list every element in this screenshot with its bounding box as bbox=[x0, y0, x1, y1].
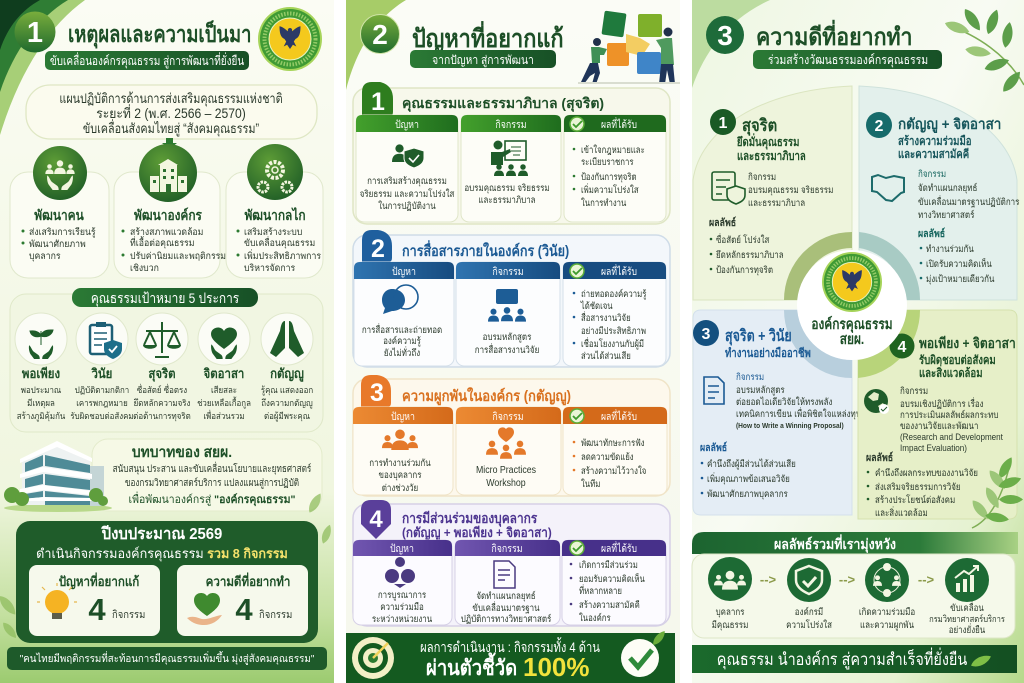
card: problem 4 staff participation: (กตัญญู + พอเพียง + จิตอาสา) bbox=[402, 525, 552, 541]
outcome: sustainable department: อย่างยั่งยืน bbox=[949, 623, 985, 635]
expected outcomes panel: ผลลัพธ์รวมที่เรามุ่งหวัง bbox=[774, 533, 896, 553]
column: activity: กิจกรรม bbox=[491, 543, 523, 555]
badge 2 bbox=[362, 230, 392, 263]
card: good deeds count bbox=[177, 565, 308, 636]
column: activity: กิจกรรม bbox=[492, 411, 524, 423]
quote bar bbox=[7, 647, 327, 670]
quadrant: sufficiency and volunteerism: การประเมินผลลัพธ์ผลกระทบ bbox=[900, 409, 998, 420]
virtue: discipline: รับผิดชอบต่อสังคม bbox=[70, 411, 134, 421]
illustration: team with puzzle pieces bbox=[578, 11, 680, 84]
subtitle pill: จากปัญหา สู่การพัฒนา bbox=[432, 54, 534, 67]
quadrant: sufficiency and volunteerism: และสิ่งแวดล้อม bbox=[919, 364, 983, 380]
quadrant: sufficiency and volunteerism: อบรมเชิงปฏิบัติการ เรื่อง bbox=[900, 397, 984, 409]
icon: document pen bbox=[704, 377, 724, 404]
card: problem 4 staff participation: การมีส่วนร่วมของบุคลากร bbox=[402, 510, 537, 527]
quadrant: honesty and discipline: (How to Write a Winning Proposal) bbox=[736, 423, 844, 430]
quadrant: sufficiency and volunteerism: Impact Evaluation) bbox=[900, 443, 967, 453]
outcome: transparent organization: ความโปร่งใส bbox=[786, 619, 833, 630]
quadrant: honesty and discipline: เทคนิคการเขียน เพื่อพิชิตใจแหล่งทุน bbox=[736, 407, 861, 420]
virtue: sufficiency: มีเหตุผล bbox=[27, 398, 55, 409]
quadrant: gratitude and volunteerism: จัดทำแผนกลยุทธ์ bbox=[918, 182, 977, 194]
panel: reasons and background bbox=[0, 0, 334, 683]
panel: good deeds to do bbox=[692, 0, 1024, 683]
quadrant: gratitude and volunteerism: กตัญญู + จิตอาสา bbox=[898, 116, 1001, 133]
quadrant: sufficiency and volunteerism: สร้างประโยชน์ต่อสังคม bbox=[875, 494, 955, 505]
center hub: virtuous organization: องค์กรคุณธรรม bbox=[811, 316, 893, 333]
virtue: gratitude: กตัญญู bbox=[270, 366, 304, 382]
column: results bbox=[563, 262, 666, 366]
card: problem 1 ethics and governance bbox=[353, 82, 670, 224]
outcome: sustainable department: กรมวิทยาศาสตร์บริการ bbox=[929, 613, 1005, 624]
decoration: branch of leaves bbox=[943, 6, 1024, 95]
icon: clipboard shield bbox=[712, 172, 745, 204]
outcome: virtuous staff bbox=[708, 557, 752, 631]
column: results: อย่างมีประสิทธิภาพ bbox=[581, 325, 646, 336]
virtue: gratitude bbox=[261, 313, 313, 422]
quadrant: honesty and discipline bbox=[693, 310, 861, 515]
quadrant: honesty and discipline: ทำงานอย่างมืออาชีพ bbox=[725, 346, 811, 360]
results banner: 100% bbox=[523, 652, 590, 682]
panel: role of the department: บทบาทของ สยผ. bbox=[132, 445, 232, 461]
card: mechanism development: พัฒนากลไก bbox=[244, 206, 306, 223]
quadrant: gratitude and volunteerism: มุ่งเป้าหมายเดียวกัน bbox=[926, 273, 994, 285]
quadrant: gratitude and volunteerism: ขับเคลื่อนมาตรฐานปฏิบัติการ bbox=[918, 195, 1020, 208]
column: problem: ต่างช่วงวัย bbox=[382, 482, 418, 493]
card: problem 3 organizational engagement: ความผูกพันในองค์กร (กตัญญู) bbox=[402, 386, 571, 405]
column: results: ผลที่ได้รับ bbox=[601, 409, 637, 423]
card: people development: บุคลากร bbox=[29, 251, 61, 262]
quadrant: honesty: กิจกรรม bbox=[748, 171, 776, 182]
column: results: ในทีม bbox=[581, 478, 600, 489]
virtue: honesty: สุจริต bbox=[148, 366, 176, 382]
quadrant: honesty bbox=[693, 86, 852, 300]
quadrant: sufficiency and volunteerism: 4 bbox=[898, 339, 907, 356]
panel: role of the department: เพื่อพัฒนาองค์กรสู่ "องค์กรคุณธรรม" bbox=[129, 492, 295, 507]
card: mechanism development bbox=[226, 144, 323, 278]
quadrant: honesty: 1 bbox=[719, 115, 728, 132]
quadrant: gratitude and volunteerism: สร้างความร่วมมือ bbox=[898, 134, 972, 148]
quadrant: sufficiency and volunteerism: พอเพียง + จิตอาสา bbox=[919, 335, 1016, 351]
quadrant: honesty and discipline: ต่อยอดไอเดียวิจัยให้ทรงพลัง bbox=[736, 396, 832, 407]
section number 1: 1 bbox=[27, 17, 43, 49]
arrow down bbox=[162, 138, 177, 149]
quadrant: honesty and discipline: กิจกรรม bbox=[736, 371, 764, 382]
card: problems count: กิจกรรม bbox=[112, 610, 145, 621]
card: organization development: สร้างสภาพแวดล้อม bbox=[130, 227, 203, 237]
icon: target bbox=[352, 637, 394, 679]
column: results: ผลที่ได้รับ bbox=[601, 117, 637, 131]
card: organization development: พัฒนาองค์กร bbox=[134, 207, 202, 223]
quadrant: honesty and discipline: พัฒนาศักยภาพบุคลากร bbox=[707, 488, 788, 500]
column: results: ที่หลากหลาย bbox=[579, 584, 622, 596]
subtitle pill: ร่วมสร้างวัฒนธรรมองค์กรคุณธรรม bbox=[768, 52, 928, 67]
quadrant: honesty: และธรรมาภิบาล bbox=[737, 150, 806, 163]
column: results: ยอมรับความคิดเห็น bbox=[579, 572, 645, 584]
card: problem 2 internal communication bbox=[353, 230, 670, 367]
column: results bbox=[562, 540, 666, 625]
column: results: ระเบียบราชการ bbox=[581, 156, 634, 167]
column: activity: และธรรมาภิบาล bbox=[478, 194, 536, 205]
quadrant: honesty and discipline: 3 bbox=[702, 326, 711, 343]
card: problem 4 staff participation bbox=[353, 500, 670, 626]
national plan box: ระยะที่ 2 (พ.ศ. 2566 – 2570) bbox=[96, 104, 246, 121]
column: problem bbox=[353, 407, 453, 495]
subtitle pill bbox=[45, 51, 249, 70]
arrow: --> bbox=[839, 572, 856, 587]
quadrant: honesty and discipline: อบรมหลักสูตร bbox=[736, 384, 785, 396]
arrow: --> bbox=[760, 572, 777, 587]
card: organization development: ที่เอื้อต่อคุณธรรม bbox=[130, 235, 194, 249]
column: activity bbox=[456, 407, 561, 495]
card: problems count: ปัญหาที่อยากแก้ bbox=[59, 572, 139, 589]
corner leaf bbox=[692, 0, 770, 88]
quadrant: sufficiency and volunteerism: กิจกรรม bbox=[900, 385, 928, 396]
column: problem bbox=[354, 262, 454, 366]
subtitle pill: ขับเคลื่อนองค์กรคุณธรรม สู่การพัฒนาที่ยั่งยืน bbox=[50, 52, 244, 68]
quadrant: gratitude and volunteerism: เปิดรับความคิดเห็น bbox=[926, 257, 992, 269]
badge 1: 1 bbox=[371, 88, 385, 116]
virtues heading bbox=[72, 288, 258, 307]
heading: เหตุผลและความเป็นมา bbox=[68, 19, 251, 49]
quadrant: honesty: ยึดมั่นคุณธรรม bbox=[736, 133, 799, 150]
section number 3: 3 bbox=[717, 20, 733, 51]
outcome: collaboration bbox=[859, 558, 915, 631]
section number 2: 2 bbox=[372, 19, 388, 50]
column: problem: ยังไม่ทั่วถึง bbox=[384, 346, 420, 358]
quadrant: gratitude and volunteerism: ทำงานร่วมกัน bbox=[926, 243, 974, 254]
panel: role of the department bbox=[92, 439, 322, 511]
quadrant: honesty and discipline: ผลลัพธ์ bbox=[700, 441, 727, 454]
column: problem: ในการปฏิบัติงาน bbox=[378, 200, 436, 211]
column: results: สื่อสารงานวิจัย bbox=[581, 311, 631, 323]
column: problem bbox=[356, 115, 458, 222]
decoration: side leaves bbox=[0, 491, 333, 640]
card: people development: พัฒนาศักยภาพ bbox=[29, 239, 86, 249]
column: results: ในองค์กร bbox=[579, 612, 611, 623]
outcome: transparent organization: องค์กรมี bbox=[795, 606, 823, 617]
panel: five target virtues bbox=[10, 288, 323, 432]
quote bar: "คนไทยมีพฤติกรรมที่สะท้อนการมีคุณธรรมเพิ่มขึ้น มุ่งสู่สังคมคุณธรรม" bbox=[20, 651, 315, 665]
column: results bbox=[564, 115, 666, 222]
quadrant: gratitude and volunteerism: และความสามัคคี bbox=[898, 147, 969, 161]
virtue: volunteerism: จิตอาสา bbox=[203, 366, 244, 381]
virtue: volunteerism: เพื่อส่วนรวม bbox=[203, 409, 245, 421]
card: good deeds count: กิจกรรม bbox=[259, 610, 292, 621]
column: activity: จัดทำแผนกลยุทธ์ bbox=[476, 590, 536, 602]
virtue: volunteerism: เสียสละ bbox=[211, 385, 237, 395]
quadrant: gratitude and volunteerism: กิจกรรม bbox=[918, 168, 946, 179]
corner leaf bbox=[346, 0, 406, 90]
section number 1 bbox=[14, 12, 56, 52]
badge 2: 2 bbox=[371, 235, 385, 263]
center hub: virtuous organization bbox=[797, 250, 907, 360]
card: problem 2 internal communication: การสื่อสารภายในองค์กร (วินัย) bbox=[402, 240, 569, 259]
quadrant: sufficiency and volunteerism: ของงานวิจัยและพัฒนา bbox=[900, 420, 979, 431]
column: problem: องค์ความรู้ bbox=[383, 335, 421, 347]
column: activity: อบรมคุณธรรม จริยธรรม bbox=[464, 182, 550, 194]
column: activity: การสื่อสารงานวิจัย bbox=[475, 343, 539, 355]
quadrant: sufficiency and volunteerism: และสิ่งแวดล้อม bbox=[875, 506, 928, 518]
card: mechanism development: เสริมสร้างระบบ bbox=[244, 227, 303, 237]
heading: ปัญหาที่อยากแก้ bbox=[412, 20, 564, 53]
column: activity: กิจกรรม bbox=[492, 266, 524, 278]
national plan box: ขับเคลื่อนสังคมไทยสู่ “สังคมคุณธรรม” bbox=[83, 119, 259, 137]
virtue: gratitude: ถึงความกตัญญู bbox=[261, 398, 313, 409]
outcome: virtuous staff: มีคุณธรรม bbox=[712, 619, 748, 631]
expected outcomes panel bbox=[692, 532, 1018, 638]
card: problem 1 ethics and governance: คุณธรรมและธรรมาภิบาล (สุจริต) bbox=[402, 95, 604, 112]
card: problems count bbox=[29, 565, 160, 636]
column: results: สร้างความสามัคคี bbox=[579, 599, 640, 610]
column: results: ในการทำงาน bbox=[581, 197, 626, 208]
card: problem 3 organizational engagement bbox=[353, 375, 670, 496]
icon: check mark bbox=[621, 629, 667, 677]
quadrant: honesty and discipline: คำนึงถึงผู้มีส่วนได้ส่วนเสีย bbox=[707, 458, 796, 470]
virtue: sufficiency: พอเพียง bbox=[22, 366, 60, 381]
column: results: พัฒนาทักษะการฟัง bbox=[581, 437, 645, 448]
column: problem: ปัญหา bbox=[391, 411, 415, 423]
column: activity: กิจกรรม bbox=[495, 119, 527, 131]
virtue: discipline bbox=[70, 313, 134, 421]
card: organization development: ปรับค่านิยมและพฤติกรรม bbox=[130, 251, 226, 261]
section number 2 bbox=[360, 14, 400, 54]
icon: handshake bbox=[872, 175, 904, 201]
badge 3: 3 bbox=[370, 379, 384, 407]
column: results: เชื่อมโยงงานกับผู้มี bbox=[581, 337, 644, 350]
virtue: honesty: ซื่อสัตย์ ซื่อตรง bbox=[137, 383, 187, 395]
column: problem: จริยธรรม และความโปร่งใส bbox=[360, 188, 455, 199]
quadrant: honesty: ยึดหลักธรรมาภิบาล bbox=[716, 249, 784, 260]
badge 4 bbox=[361, 500, 391, 539]
quadrant: sufficiency and volunteerism: ส่งเสริมจริยธรรมการวิจัย bbox=[875, 481, 961, 492]
outcome: collaboration: เกิดความร่วมมือ bbox=[859, 606, 915, 617]
column: activity: ขับเคลื่อนมาตรฐาน bbox=[472, 601, 540, 614]
panel: role of the department: สนับสนุน ประสาน และขับเคลื่อนนโยบายและยุทธศาสตร์ bbox=[113, 461, 311, 475]
quadrant: gratitude and volunteerism: ทางวิทยาศาสตร์ bbox=[918, 209, 975, 220]
column: results: ผลที่ได้รับ bbox=[601, 264, 637, 278]
quadrant: sufficiency and volunteerism: ผลลัพธ์ bbox=[866, 451, 893, 464]
center hub: virtuous organization: สยผ. bbox=[840, 331, 864, 347]
card: problems count: 4 bbox=[88, 592, 106, 627]
column: activity: อบรมหลักสูตร bbox=[483, 331, 532, 343]
results banner: ผลการดำเนินงาน : กิจกรรมทั้ง 4 ด้าน bbox=[420, 637, 600, 655]
icon: leaf bbox=[969, 653, 993, 669]
virtue: discipline: เคารพกฎหมาย bbox=[76, 398, 128, 408]
virtue: discipline: วินัย bbox=[90, 366, 112, 381]
column: problem: การสื่อสารและถ่ายทอด bbox=[362, 323, 442, 335]
badge 4: 4 bbox=[369, 506, 383, 533]
card: organization development: เชิงบวก bbox=[130, 263, 159, 273]
column: problem: ความร่วมมือ bbox=[380, 601, 424, 612]
panel: budget year: ดำเนินกิจกรรมองค์กรคุณธรรม รวม 8 กิจกรรม bbox=[36, 546, 288, 562]
column: results: ป้องกันการทุจริต bbox=[581, 171, 637, 183]
subtitle pill bbox=[410, 50, 556, 68]
column: activity bbox=[461, 115, 561, 222]
column: activity bbox=[456, 262, 560, 366]
quadrant: gratitude and volunteerism bbox=[859, 86, 1020, 300]
quadrant: honesty: และธรรมาภิบาล bbox=[748, 197, 805, 208]
column: problem: ปัญหา bbox=[395, 119, 419, 131]
card: mechanism development: เพิ่มประสิทธิภาพการ bbox=[244, 249, 321, 261]
column: results: ส่วนได้ส่วนเสีย bbox=[581, 350, 631, 361]
card: good deeds count: 4 bbox=[235, 592, 253, 627]
column: activity: ปฏิบัติการทางวิทยาศาสตร์ bbox=[461, 613, 552, 624]
outcome: transparent organization bbox=[786, 558, 833, 630]
quadrant: gratitude and volunteerism: ผลลัพธ์ bbox=[918, 227, 945, 240]
quadrant: honesty and discipline: สุจริต + วินัย bbox=[725, 327, 792, 345]
column: problem: การเสริมสร้างคุณธรรม bbox=[367, 175, 447, 187]
column: results: ถ่ายทอดองค์ความรู้ bbox=[581, 288, 647, 300]
column: problem: การทำงานร่วมกัน bbox=[369, 457, 431, 468]
virtue: gratitude: รู้คุณ แสดงออก bbox=[261, 385, 313, 396]
illustration: office building bbox=[4, 441, 112, 512]
column: results: ได้ชัดเจน bbox=[580, 300, 613, 311]
quadrant: honesty: ป้องกันการทุจริต bbox=[716, 264, 773, 276]
card: mechanism development: ขับเคลื่อนคุณธรรม bbox=[244, 236, 315, 249]
virtue: sufficiency: สร้างภูมิคุ้มกัน bbox=[17, 411, 65, 422]
icon: department logo center bbox=[822, 252, 882, 312]
virtue: honesty: ต่อต้านการทุจริต bbox=[133, 411, 191, 422]
column: results: เกิดการมีส่วนร่วม bbox=[579, 559, 638, 570]
virtue: volunteerism bbox=[197, 313, 251, 421]
card: organization development bbox=[114, 144, 226, 278]
virtue: sufficiency: พอประมาณ bbox=[21, 385, 61, 395]
icon: globe bbox=[864, 389, 889, 414]
virtue: discipline: ปฏิบัติตามกติกา bbox=[75, 385, 129, 395]
corner leaves bbox=[0, 0, 85, 135]
panel: budget year: ปีงบประมาณ 2569 bbox=[101, 526, 223, 543]
outcome: sustainable department bbox=[929, 558, 1005, 635]
results banner bbox=[346, 629, 675, 683]
icon: department logo bbox=[258, 7, 322, 71]
panel: role of the department: ของกรมวิทยาศาสตร์บริการ แปลงแผนสู่การปฏิบัติ bbox=[125, 476, 299, 489]
virtue: honesty: ยึดหลักความจริง bbox=[134, 398, 190, 408]
quadrant: sufficiency and volunteerism: คำนึงถึงผลกระทบของงานวิจัย bbox=[875, 467, 978, 478]
column: results: ผลที่ได้รับ bbox=[601, 541, 637, 555]
column: results: ลดความขัดแย้ง bbox=[581, 451, 634, 462]
column: activity bbox=[455, 540, 560, 625]
card: good deeds count: ความดีที่อยากทำ bbox=[206, 572, 290, 589]
quadrant: gratitude and volunteerism: 2 bbox=[875, 118, 884, 135]
quadrant: sufficiency and volunteerism: (Research and Development bbox=[900, 432, 1004, 442]
quadrant: sufficiency and volunteerism: รับผิดชอบต่อสังคม bbox=[919, 354, 996, 367]
national plan box: แผนปฏิบัติการด้านการส่งเสริมคุณธรรมแห่งชาติ bbox=[59, 91, 283, 107]
card: people development: พัฒนาคน bbox=[34, 207, 84, 223]
column: activity: Micro Practices bbox=[476, 463, 536, 475]
column: problem: ของบุคลากร bbox=[379, 469, 422, 481]
virtue: gratitude: ต่อผู้มีพระคุณ bbox=[264, 411, 310, 422]
column: problem: ปัญหา bbox=[392, 266, 416, 278]
column: results bbox=[563, 407, 667, 495]
column: problem: ปัญหา bbox=[390, 543, 414, 555]
quadrant: honesty: อบรมคุณธรรม จริยธรรม bbox=[748, 184, 833, 196]
column: problem: ระหว่างหน่วยงาน bbox=[372, 613, 432, 624]
virtue: volunteerism: ช่วยเหลือเกื้อกูล bbox=[197, 396, 251, 409]
column: problem bbox=[353, 540, 452, 625]
outcome: virtuous staff: บุคลากร bbox=[716, 606, 745, 618]
heading: ความดีที่อยากทำ bbox=[756, 20, 913, 50]
card: people development bbox=[10, 146, 109, 278]
column: problem: การบูรณาการ bbox=[378, 589, 426, 601]
quadrant: honesty: ผลลัพธ์ bbox=[709, 216, 736, 229]
quadrant: honesty: สุจริต bbox=[742, 116, 777, 136]
virtue: sufficiency bbox=[15, 313, 67, 422]
column: activity: Workshop bbox=[486, 476, 526, 488]
decoration: bottom right leaves bbox=[969, 455, 1023, 528]
quadrant: sufficiency and volunteerism bbox=[858, 310, 1017, 519]
results banner: ผ่านตัวชี้วัด bbox=[426, 652, 517, 680]
outcome: collaboration: และความผูกพัน bbox=[860, 619, 914, 631]
outcome: sustainable department: ขับเคลื่อน bbox=[950, 601, 984, 613]
virtues heading: คุณธรรมเป้าหมาย 5 ประการ bbox=[91, 290, 239, 307]
panel: budget year bbox=[16, 521, 318, 643]
closing slogan bar bbox=[692, 645, 1017, 673]
quadrant: honesty: ซื่อสัตย์ โปร่งใส bbox=[716, 233, 770, 245]
card: people development: ส่งเสริมการเรียนรู้ bbox=[29, 227, 96, 238]
column: results: เข้าใจกฎหมายและ bbox=[581, 144, 645, 155]
virtue: honesty bbox=[133, 313, 191, 422]
badge 1 bbox=[362, 82, 393, 116]
panel: problems to solve bbox=[346, 0, 680, 683]
column: results: สร้างความไว้วางใจ bbox=[581, 465, 646, 476]
section number 3 bbox=[706, 16, 744, 54]
arrow: --> bbox=[918, 572, 935, 587]
card: mechanism development: บริหารจัดการ bbox=[244, 263, 295, 273]
national plan box bbox=[26, 85, 317, 139]
column: results: เพิ่มความโปร่งใส bbox=[581, 183, 639, 195]
subtitle pill bbox=[753, 50, 942, 69]
badge 3 bbox=[361, 375, 391, 407]
quadrant: honesty and discipline: เพิ่มคุณภาพข้อเสนอวิจัย bbox=[707, 472, 790, 485]
closing slogan bar: คุณธรรม นำองค์กร สู่ความสำเร็จที่ยั่งยืน bbox=[717, 647, 967, 670]
